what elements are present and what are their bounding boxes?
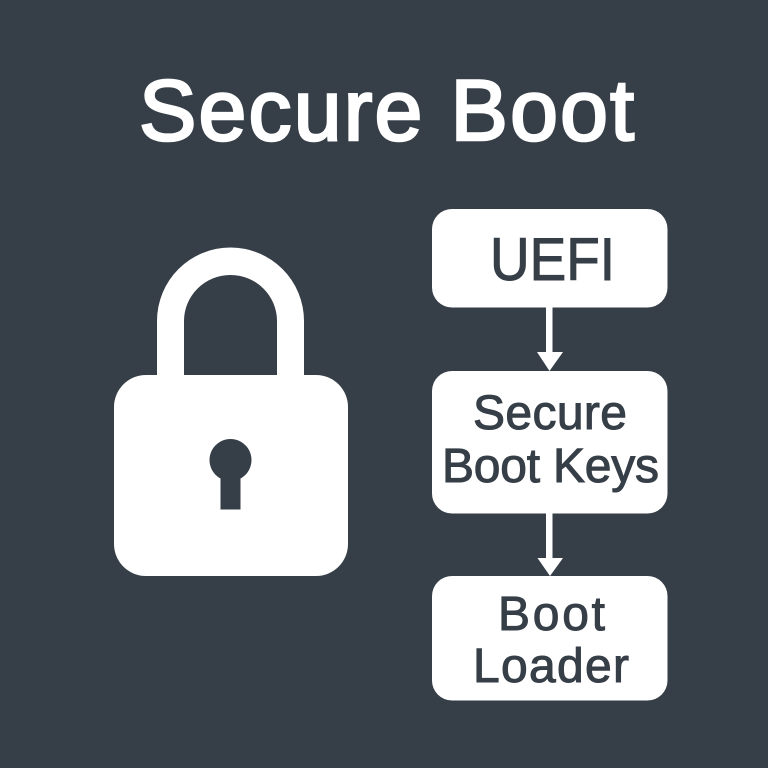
- arrow: Secure Boot Keys to Boot Loader: [538, 513, 563, 576]
- flow step: Secure Boot Keys: Secure: [473, 387, 627, 440]
- padlock shackle: [157, 247, 304, 380]
- flow step: Boot Loader: [432, 576, 668, 700]
- padlock body with keyhole: [114, 375, 348, 576]
- flow step: UEFI: UEFI: [490, 226, 615, 293]
- title: Secure Boot: [139, 63, 634, 159]
- icon: padlock: [114, 247, 348, 576]
- flow step: UEFI: [432, 209, 668, 308]
- flow step: Boot Loader: Boot: [498, 588, 605, 641]
- flow step: Boot Loader: Loader: [473, 640, 629, 693]
- flow step: Secure Boot Keys: Boot Keys: [442, 440, 659, 493]
- arrow: UEFI to Secure Boot Keys: [537, 307, 563, 371]
- flow step: Secure Boot Keys: [432, 371, 668, 514]
